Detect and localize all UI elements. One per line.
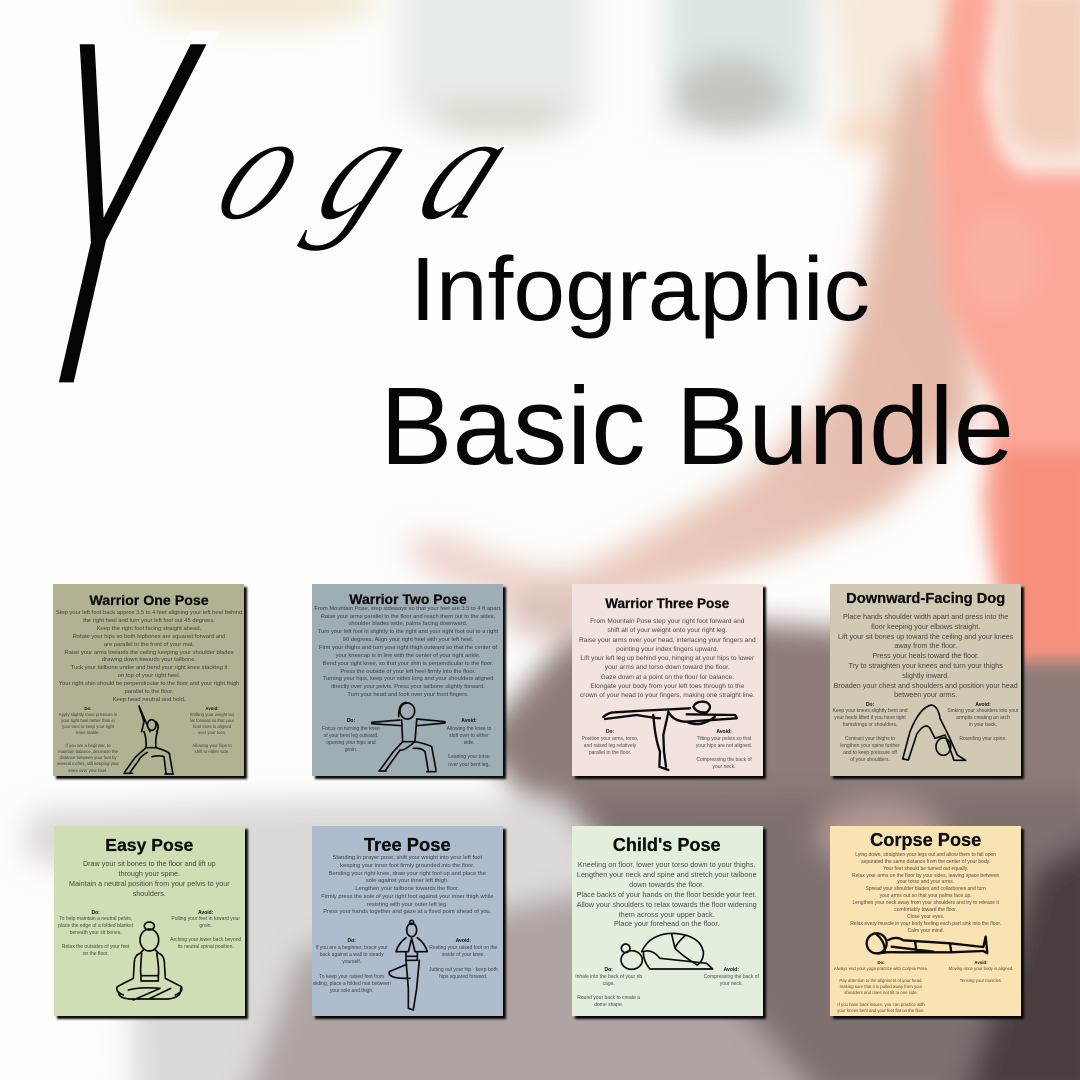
instructions: Press your hands together and gaze at a fixed point ahead of you. <box>323 909 491 915</box>
card title: Tree Pose <box>364 834 451 855</box>
do list: Do: <box>92 910 100 916</box>
instructions: Turning your hips, keep your sides long and your shoulders aligned <box>323 676 493 682</box>
instructions <box>850 852 1001 934</box>
panel: Warrior Three Pose <box>572 584 763 776</box>
avoid list: Compressing the back of <box>704 974 759 980</box>
instructions: Spread your shoulder blades and collarbones and turn <box>866 886 986 892</box>
avoid list <box>190 706 234 754</box>
avoid list: groin. <box>199 923 212 929</box>
instructions: them across your upper back. <box>619 910 715 919</box>
instructions: Firmly press the sole of your right foot against your inner thigh while <box>321 894 493 900</box>
avoid list: Avoid: <box>975 702 991 708</box>
do list: your sole and thigh. <box>330 988 374 994</box>
avoid list: hips squared forward. <box>439 974 487 980</box>
do list: Contract your thighs to <box>845 736 895 742</box>
do list: on the floor. <box>83 951 109 957</box>
panel: Easy Pose <box>54 826 245 1016</box>
card title: Easy Pose <box>105 834 193 854</box>
avoid list: Avoid: <box>461 718 477 724</box>
instructions: your torso and your arms. <box>897 879 954 885</box>
avoid list: shift over to either <box>449 733 489 739</box>
do list: yourself. <box>342 959 361 965</box>
do list: To help maintain a neutral pelvis, <box>59 916 132 922</box>
do list: and raised leg relatively <box>584 742 636 748</box>
instructions <box>576 860 757 928</box>
instructions <box>579 618 756 699</box>
do list: beneath your sit bones. <box>70 930 122 936</box>
instructions: Place hands shoulder width apart and press into the <box>843 612 1008 621</box>
instructions: Elongate your body from your left toes through to the <box>590 683 744 690</box>
instructions: Rotate your hips so both hipbones are squared forward and <box>73 634 225 640</box>
instructions: Firm your thighs and turn your right thigh outward so that the center of <box>319 645 497 651</box>
avoid list: front knee is aligned <box>193 724 231 729</box>
instructions <box>321 855 494 915</box>
instructions: your arms and torso down toward the floor. <box>605 664 730 671</box>
avoid list: Resting your raised foot on the <box>429 945 497 951</box>
instructions: away from the floor. <box>894 641 957 650</box>
avoid list: your hips are not aligned. <box>696 742 752 748</box>
do list: maintain balance, decrease the <box>58 749 118 754</box>
do list: place the edge of a folded blanket <box>58 923 133 929</box>
avoid list: Rounding your spine. <box>959 736 1007 742</box>
avoid list: side. <box>464 740 474 746</box>
do list: shoulders and does not tilt to one side. <box>844 990 918 995</box>
avoid list: its neutral spinal position. <box>178 944 234 950</box>
avoid list <box>446 718 492 768</box>
do list: your knees bent and your feet flat on the floor. <box>837 1008 925 1013</box>
do list: If you are a beginner, to <box>65 743 111 748</box>
instructions: Lift your sit bones up toward the ceiling and your knees <box>838 632 1013 641</box>
avoid list <box>170 910 241 950</box>
instructions: Tuck your tailbone under and bend your right knee stacking it <box>71 665 227 671</box>
instructions: keeping your inner foot firmly grounded into the floor. <box>340 863 474 869</box>
instructions: Place your forehead on the floor. <box>614 919 719 928</box>
avoid list: Leaning your torso <box>448 754 490 760</box>
instructions: Close your eyes. <box>907 914 944 920</box>
card title: Child's Pose <box>613 835 721 855</box>
instructions: Lengthen your neck away from your shoulders and try to release it <box>852 900 999 906</box>
instructions: pointing your index fingers upward. <box>616 646 718 653</box>
avoid list: Avoid: <box>716 728 732 734</box>
do list: parallel to the floor. <box>589 750 631 756</box>
avoid list: Compressing the back of <box>696 756 752 762</box>
do list: lengthen your spine further <box>840 743 900 749</box>
avoid list: over your bent leg. <box>448 762 490 768</box>
instructions: Lengthen your tailbone towards the floor. <box>355 886 459 892</box>
avoid list: far forward so that your <box>190 718 234 723</box>
avoid list: your neck. <box>712 764 736 770</box>
do list: Position your arms, torso, <box>582 736 638 742</box>
avoid list <box>429 938 498 980</box>
instructions: your arms out so that your palms face up. <box>880 893 972 899</box>
do list: Relax the outsides of your feet <box>62 944 129 950</box>
do list: your right heel rather than in <box>61 718 115 723</box>
avoid list: Allowing the knee to <box>447 726 491 732</box>
instructions: Lying down, straighten your legs out and allow them to fall open <box>855 852 996 858</box>
instructions: floor keeping your elbows straight. <box>871 622 980 631</box>
instructions: shoulder blades wide, palms facing downward. <box>349 621 467 627</box>
instructions: Lengthen your neck and spine and stretch your tailbone <box>577 870 757 879</box>
avoid list: your neck. <box>720 980 743 986</box>
instructions: through your spine. <box>119 869 180 878</box>
do list: knee over your heel. <box>69 768 107 773</box>
do list: dome shape. <box>594 1002 623 1008</box>
do list <box>322 718 380 753</box>
do list: Do: <box>84 706 92 711</box>
instructions: Raise your arms parallel to the floor and reach them out to the sides, <box>321 614 495 620</box>
icon: warrior two figure <box>370 702 446 772</box>
instructions: Broaden your chest and shoulders and position your head <box>834 681 1018 690</box>
do list: Inhale into the back of your rib <box>575 974 642 980</box>
instructions: shoulders. <box>133 889 166 898</box>
do list: making sure that it is pulled away from your <box>840 984 922 989</box>
avoid list: Pulling your feet in toward your <box>171 916 240 922</box>
instructions: Keep the right foot facing straight ahead. <box>97 626 201 632</box>
do list: back against a wall to steady <box>320 952 384 958</box>
avoid list: over your toes. <box>198 730 226 735</box>
icon: easy pose figure <box>116 921 183 1001</box>
card title: Corpse Pose <box>870 830 981 850</box>
avoid list: Tensing your muscles. <box>960 978 1002 983</box>
card title: Downward-Facing Dog <box>846 591 1005 607</box>
icon: tree pose figure <box>388 920 428 1011</box>
instructions: Step your left foot back approx 3.5 to 4 feet aligning your left heel behind <box>56 610 242 616</box>
instructions: 90 degrees. Align your right heel with your left heel. <box>343 637 473 643</box>
title: Yoga <box>0 0 579 501</box>
avoid list: Avoid: <box>974 960 988 965</box>
icon: downward dog figure <box>902 704 966 762</box>
instructions: between your arms. <box>894 690 957 699</box>
avoid list: Avoid: <box>205 706 219 711</box>
instructions: Bend your right knee, so that your shin is perpendicular to the floor. <box>323 661 493 667</box>
avoid list: Avoid: <box>198 910 213 916</box>
avoid list: Avoid: <box>456 938 471 944</box>
do list: several inches, still keeping your <box>57 761 119 766</box>
panel: Warrior One Pose <box>53 584 244 776</box>
instructions: resisting with your outer left leg. <box>367 902 448 908</box>
instructions: your kneecap is in line with the center of your right ankle. <box>336 653 480 659</box>
instructions: Bending your right knee, draw your right foot up and place the <box>329 871 486 877</box>
instructions: Turn your left foot in slightly to the right and your right foot out to a right <box>318 629 498 635</box>
instructions: Standing in prayer pose, shift your weight into your left foot <box>332 855 482 861</box>
avoid list <box>947 702 1019 742</box>
instructions: Place backs of your hands on the floor beside your feet. <box>577 890 757 899</box>
do list <box>312 938 391 994</box>
avoid list: Sinking your shoulders into your <box>947 708 1019 714</box>
panel: Tree Pose <box>312 826 503 1016</box>
do list <box>57 706 119 773</box>
card title: Warrior One Pose <box>89 593 209 609</box>
title: Infographic: Infographic <box>410 240 870 340</box>
avoid list <box>696 728 752 770</box>
instructions: Relax your arms on the floor by your sides, leaving space between <box>852 873 999 879</box>
instructions: are parallel to the front of your mat. <box>104 642 194 648</box>
avoid list: Jutting out your hip - keep both <box>429 966 498 972</box>
do list <box>575 966 642 1008</box>
avoid list: Arching your lower back beyond <box>170 937 241 943</box>
do list <box>834 960 928 1013</box>
instructions: sole against your inner left thigh. <box>366 878 449 884</box>
do list: hamstrings or shoulders. <box>843 722 897 728</box>
instructions: Kneeling on floor, lower your torso down to your thighs. <box>578 860 756 869</box>
do list: Pay attention to the alignment of your head, <box>839 978 923 983</box>
title: Basic Bundle: Basic Bundle <box>380 365 1014 488</box>
instructions: Keep head neutral and hold. <box>113 697 185 703</box>
avoid list <box>704 966 759 986</box>
avoid list: armpits creating an arch <box>956 715 1010 721</box>
avoid list: Avoid: <box>724 966 739 972</box>
do list: of your bent leg outward, <box>323 733 379 739</box>
do list: opening your hips and <box>326 740 376 746</box>
instructions: Lift your left leg up behind you, hinging at your hips to lower <box>580 655 754 662</box>
instructions: slightly inward. <box>902 671 949 680</box>
instructions: Relax every muscle in your body feeling each part sink into the floor. <box>850 921 1001 927</box>
do list <box>832 702 908 763</box>
instructions: Try to straighten your knees and turn your thighs <box>848 661 1003 670</box>
instructions: From Mountain Pose, step sideways so that your feet are 3.5 to 4 ft apart. <box>314 606 502 612</box>
avoid list: Tilting your pelvis so that <box>697 736 751 742</box>
panel: Downward-Facing Dog <box>830 584 1021 776</box>
instructions <box>69 859 230 898</box>
do list: cage. <box>603 980 615 986</box>
instructions: Raise your arms over your head, interlacing your fingers and <box>579 636 756 644</box>
do list: Round your back to create a <box>577 994 640 1000</box>
do list: Always end your yoga practice with Corpse Pose. <box>834 966 928 971</box>
avoid list: Moving once your body is aligned. <box>949 966 1013 971</box>
do list: Do: <box>877 960 885 965</box>
do list <box>58 910 134 957</box>
instructions: Maintain a neutral position from your pelvis to your <box>69 879 230 888</box>
avoid list: inside of your knee. <box>442 952 485 958</box>
do list: Apply slightly more pressure in <box>59 712 117 717</box>
instructions: Your right shin should be perpendicular to the floor and your right thigh <box>59 681 239 687</box>
do list: Do: <box>347 718 355 724</box>
title: Yoga: oga <box>191 81 579 253</box>
instructions: parallel to the floor. <box>124 689 173 695</box>
do list: your toes to keep your right <box>62 724 114 729</box>
card title: Warrior Three Pose <box>605 596 729 611</box>
avoid list: in your back. <box>969 722 997 728</box>
do list: of your shoulders. <box>850 757 890 763</box>
do list: sliding, place a folded mat between <box>313 981 391 987</box>
do list: groin. <box>345 747 357 753</box>
do list: If you are a beginner, brace your <box>316 945 388 951</box>
icon: corpse pose figure <box>866 932 988 955</box>
instructions <box>314 606 502 698</box>
do list: Do: <box>866 702 874 708</box>
instructions: crown of your head to your fingers, making one straight line. <box>580 692 755 699</box>
do list: To keep your raised foot from <box>319 974 384 980</box>
instructions <box>56 610 242 703</box>
instructions: Draw your sit bones to the floor and lift up <box>83 859 216 868</box>
do list: Do: <box>606 728 614 734</box>
avoid list: Allowing your hips to <box>192 743 232 748</box>
icon: warrior one figure <box>123 705 174 775</box>
do list: If you have back issues, you can practice with <box>837 1002 925 1007</box>
panel: Child's Pose <box>572 826 763 1016</box>
instructions: Press the outside of your left heel firmly into the floor. <box>340 669 476 675</box>
instructions: Turn your head and look over your front fingers. <box>347 692 469 698</box>
instructions: Gaze down at a point on the floor for balance. <box>601 674 734 680</box>
instructions: Calm your mind. <box>907 928 944 934</box>
do list <box>582 728 638 756</box>
instructions: shift all of your weight onto your right leg. <box>607 627 727 634</box>
avoid list <box>948 960 1014 983</box>
instructions: separated the same distance from the center of your body. <box>861 859 990 865</box>
instructions: Press your heals toward the floor. <box>872 651 979 660</box>
do list: Do: <box>605 966 613 972</box>
do list: Keep your knees slightly bent and <box>832 708 908 714</box>
avoid list: shift to either side. <box>195 749 229 754</box>
icon: child's pose figure <box>620 932 714 970</box>
do list: your heels lifted if you have tight <box>834 715 906 721</box>
card title: Warrior Two Pose <box>349 591 467 607</box>
do list: knee stable. <box>76 730 100 735</box>
instructions: Your feet should be turned out equally. <box>883 866 968 872</box>
do list: Focus on turning the knee <box>322 726 380 732</box>
avoid list: Shifting your weight too <box>190 712 234 717</box>
do list: Do: <box>348 938 356 944</box>
instructions: down towards the floor. <box>629 880 704 889</box>
instructions <box>834 612 1018 699</box>
panel: Corpse Pose <box>830 826 1021 1016</box>
instructions: drawing down towards your tailbone. <box>102 657 196 663</box>
instructions: comfortably toward the floor. <box>894 907 957 913</box>
do list: distance between your feet by <box>59 755 117 760</box>
instructions: on top of your right heel. <box>118 673 180 679</box>
panel: Warrior Two Pose <box>312 584 503 776</box>
instructions: From Mountain Pose step your right foot forward and <box>590 618 744 625</box>
instructions: Raise your arms towards the ceiling keeping your shoulder blades <box>64 650 234 656</box>
instructions: Allow your shoulders to relax towards the floor widening <box>577 900 757 909</box>
instructions: the right heel and turn your left foot out 45 degrees. <box>83 618 215 624</box>
instructions: directly over your pelvis. Press your tailbone slightly forward. <box>331 684 485 690</box>
do list: and to keep pressure off <box>843 750 897 756</box>
icon: warrior three figure <box>602 700 738 772</box>
